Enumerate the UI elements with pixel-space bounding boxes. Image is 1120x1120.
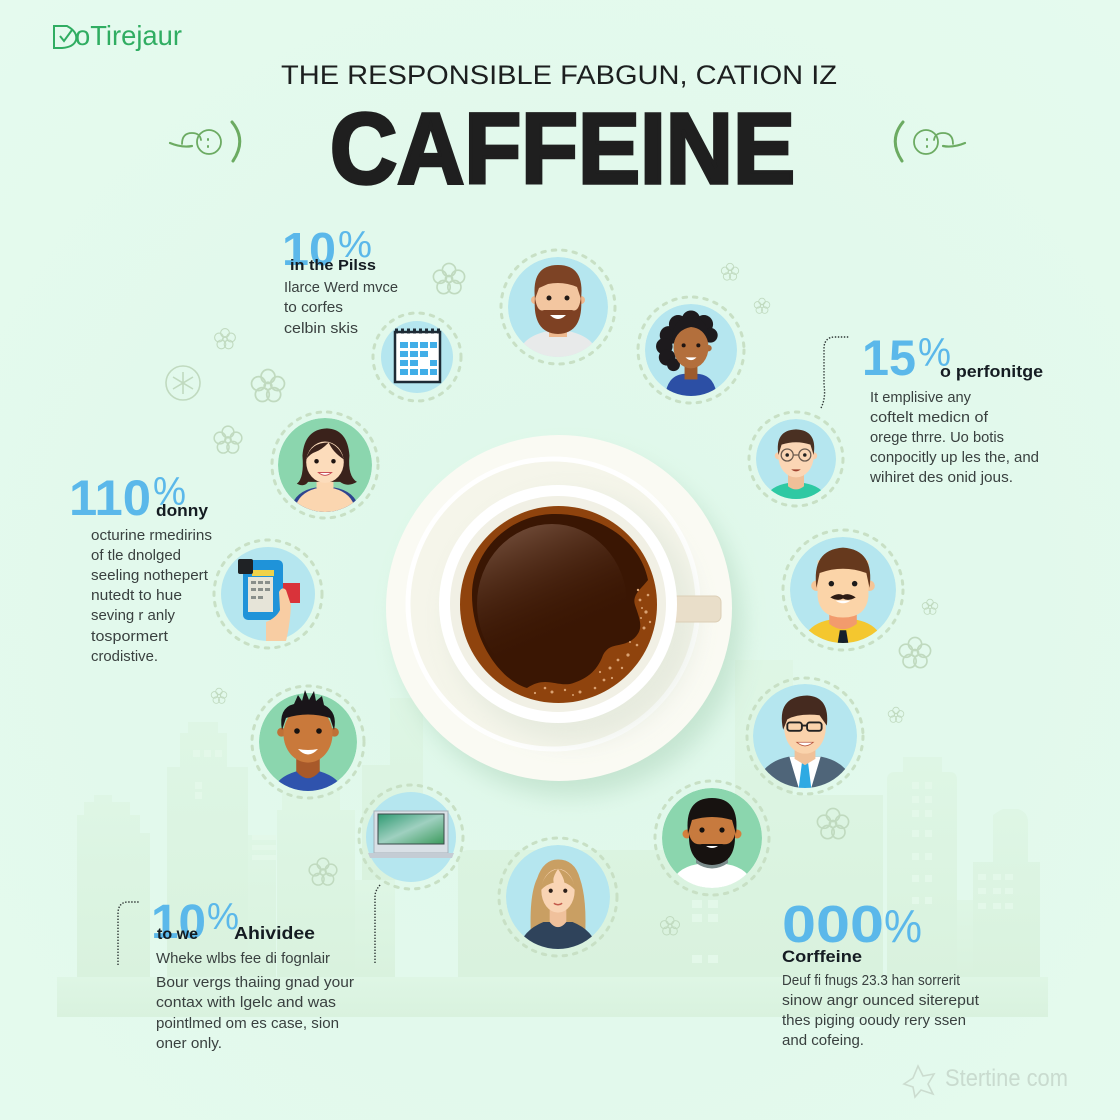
coffee cup on saucer [386,435,742,796]
stat number: % [338,224,372,266]
stat number: % [207,896,239,938]
stat body [91,528,212,665]
decorative flower icons [166,263,938,935]
icon: laptop [359,785,463,889]
stat body [284,280,398,337]
stat body: conpocitly up les the, and [870,450,1039,466]
avatar: man with glasses [749,412,843,506]
stat body: of tle dnolged [91,548,181,564]
main heading: CAFFEINE [330,93,795,205]
stat body: pointlmed om es case, sion [156,1016,339,1032]
cup handle [670,596,721,622]
stat number [862,330,951,386]
stat body: oner only. [156,1036,222,1052]
stat body: Wheke wlbs fee di fognlair [156,951,330,967]
stat body: tospormert [91,629,168,645]
avatar: curly-haired woman [638,297,744,403]
stat body: Deuf fi fnugs 23.3 han sorrerit [782,973,960,989]
stat number: 000 [782,896,884,954]
avatar: bearded man, green background [655,781,769,895]
ornament: right [895,122,965,161]
stat heading: to we [157,926,198,943]
stat body: wihiret des onid jous. [869,470,1013,486]
stat number: % [884,900,922,952]
stat body [869,390,1039,486]
logo: oTirejaur [75,20,182,51]
icon: hand holding phone [214,540,322,648]
stat number [282,223,372,275]
stat number [782,896,922,954]
stat body: and cofeing. [782,1033,864,1049]
callout connector [821,337,849,408]
stat body: orege thrre. Uo botis [870,430,1004,446]
stat body: octurine rmedirins [91,528,212,544]
stat body: Bour vergs thaiing gnad your [156,975,354,991]
avatar: spiky-haired man [252,686,364,798]
avatar: man in suit [747,678,863,794]
stat number: 10 [282,223,336,275]
stat body [782,973,979,1049]
callout connector left [118,902,140,965]
stat body: coftelt medicn of [870,410,989,426]
stat body: seeling nothepert [91,568,208,584]
avatar: man with moustache [783,530,903,650]
stat number [69,470,186,526]
skyline backdrop [57,660,1048,1017]
stat number: 15 [862,330,916,386]
stat block: 15% perfonitge [821,330,1043,486]
saucer [386,435,732,781]
ornament: left [170,122,240,161]
cup body [439,485,677,723]
stat heading: o perfonitge [940,363,1043,381]
avatar: woman with bob haircut [272,412,378,518]
stat number: % [918,331,951,375]
coffee surface [460,506,657,703]
icon: calendar [373,313,461,401]
avatar: bearded man [501,250,615,364]
avatar: blond woman [499,838,617,956]
stat body: to corfes [284,300,343,316]
stat body: sinow angr ounced sitereput [782,993,979,1009]
stat heading: donny [156,501,209,520]
callout connector right [375,884,381,963]
stat block: 110% donny [69,470,212,665]
stat heading [157,923,315,943]
stat number: 10 [151,896,206,949]
stat body: Ilarce Werd mvce [284,280,398,296]
stat body: celbin skis [284,321,358,337]
crema [534,589,651,696]
stat block: 000% Corffeine [782,896,979,1049]
watermark: Stertine com [945,1065,1068,1092]
stat number [151,896,239,949]
stat block: 10% in the Pilss [282,223,398,337]
stat body [156,951,354,1052]
stat body: seving r anly [91,608,176,624]
title line: THE RESPONSIBLE FABGUN, CATION IZ [281,60,837,90]
stat block: 10% Ahividee [118,884,381,1052]
stat number: 110 [69,470,151,526]
stat body: crodistive. [91,649,158,665]
stat heading: Corffeine [782,948,862,966]
stat body: nutedt to hue [91,588,182,604]
stat body: It emplisive any [870,390,972,406]
stat number: % [153,470,186,514]
watermark [904,1065,1068,1097]
stat body: contax with lgelc and was [156,995,336,1011]
stat heading: in the Pilss [290,258,376,274]
stat heading: Ahividee [234,923,315,943]
stat body: thes piging ooudy rery ssen [782,1013,966,1029]
